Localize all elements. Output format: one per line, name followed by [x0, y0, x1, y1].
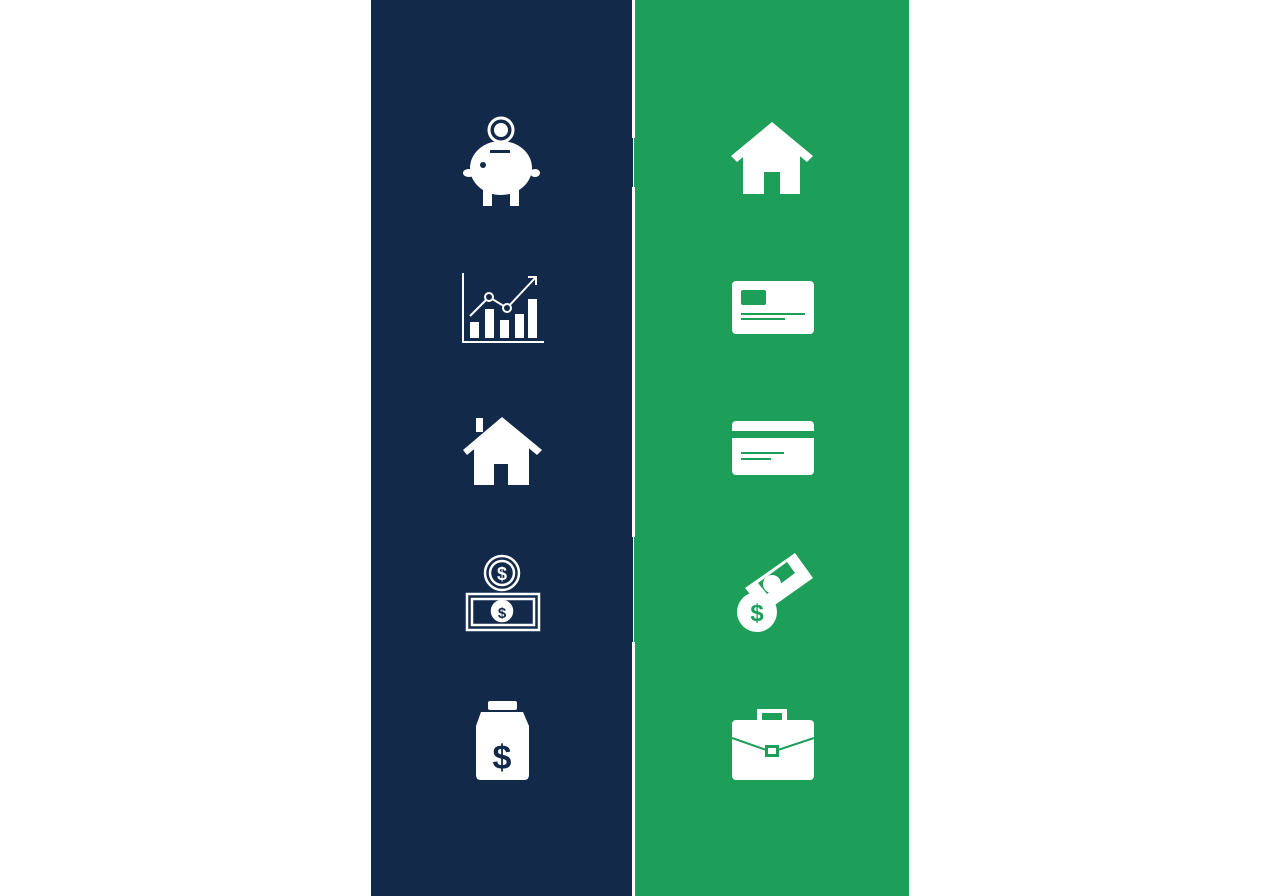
dollar signs on navy icons: $: [498, 605, 507, 622]
dollar signs on navy icons: [493, 564, 512, 777]
icon: briefcase: [732, 709, 814, 780]
icon: house (green): [731, 122, 813, 194]
icon: house (navy): [463, 417, 542, 485]
icon: piggy bank: [463, 118, 540, 206]
dollar signs on navy icons: $: [493, 739, 512, 777]
divider: [632, 0, 635, 896]
icon: ID card: [732, 281, 814, 334]
icon: coin and banknote: [467, 556, 539, 630]
icon: growth chart: [463, 273, 544, 342]
icon: cash and coin: [737, 553, 813, 632]
panel: navy column: [371, 0, 633, 896]
icon: money jar: [476, 701, 529, 780]
icon: credit card: [732, 421, 814, 475]
dollar signs on navy icons: $: [497, 564, 507, 584]
icon: cash and coin: $: [750, 600, 764, 627]
panel: green column: [634, 0, 909, 896]
